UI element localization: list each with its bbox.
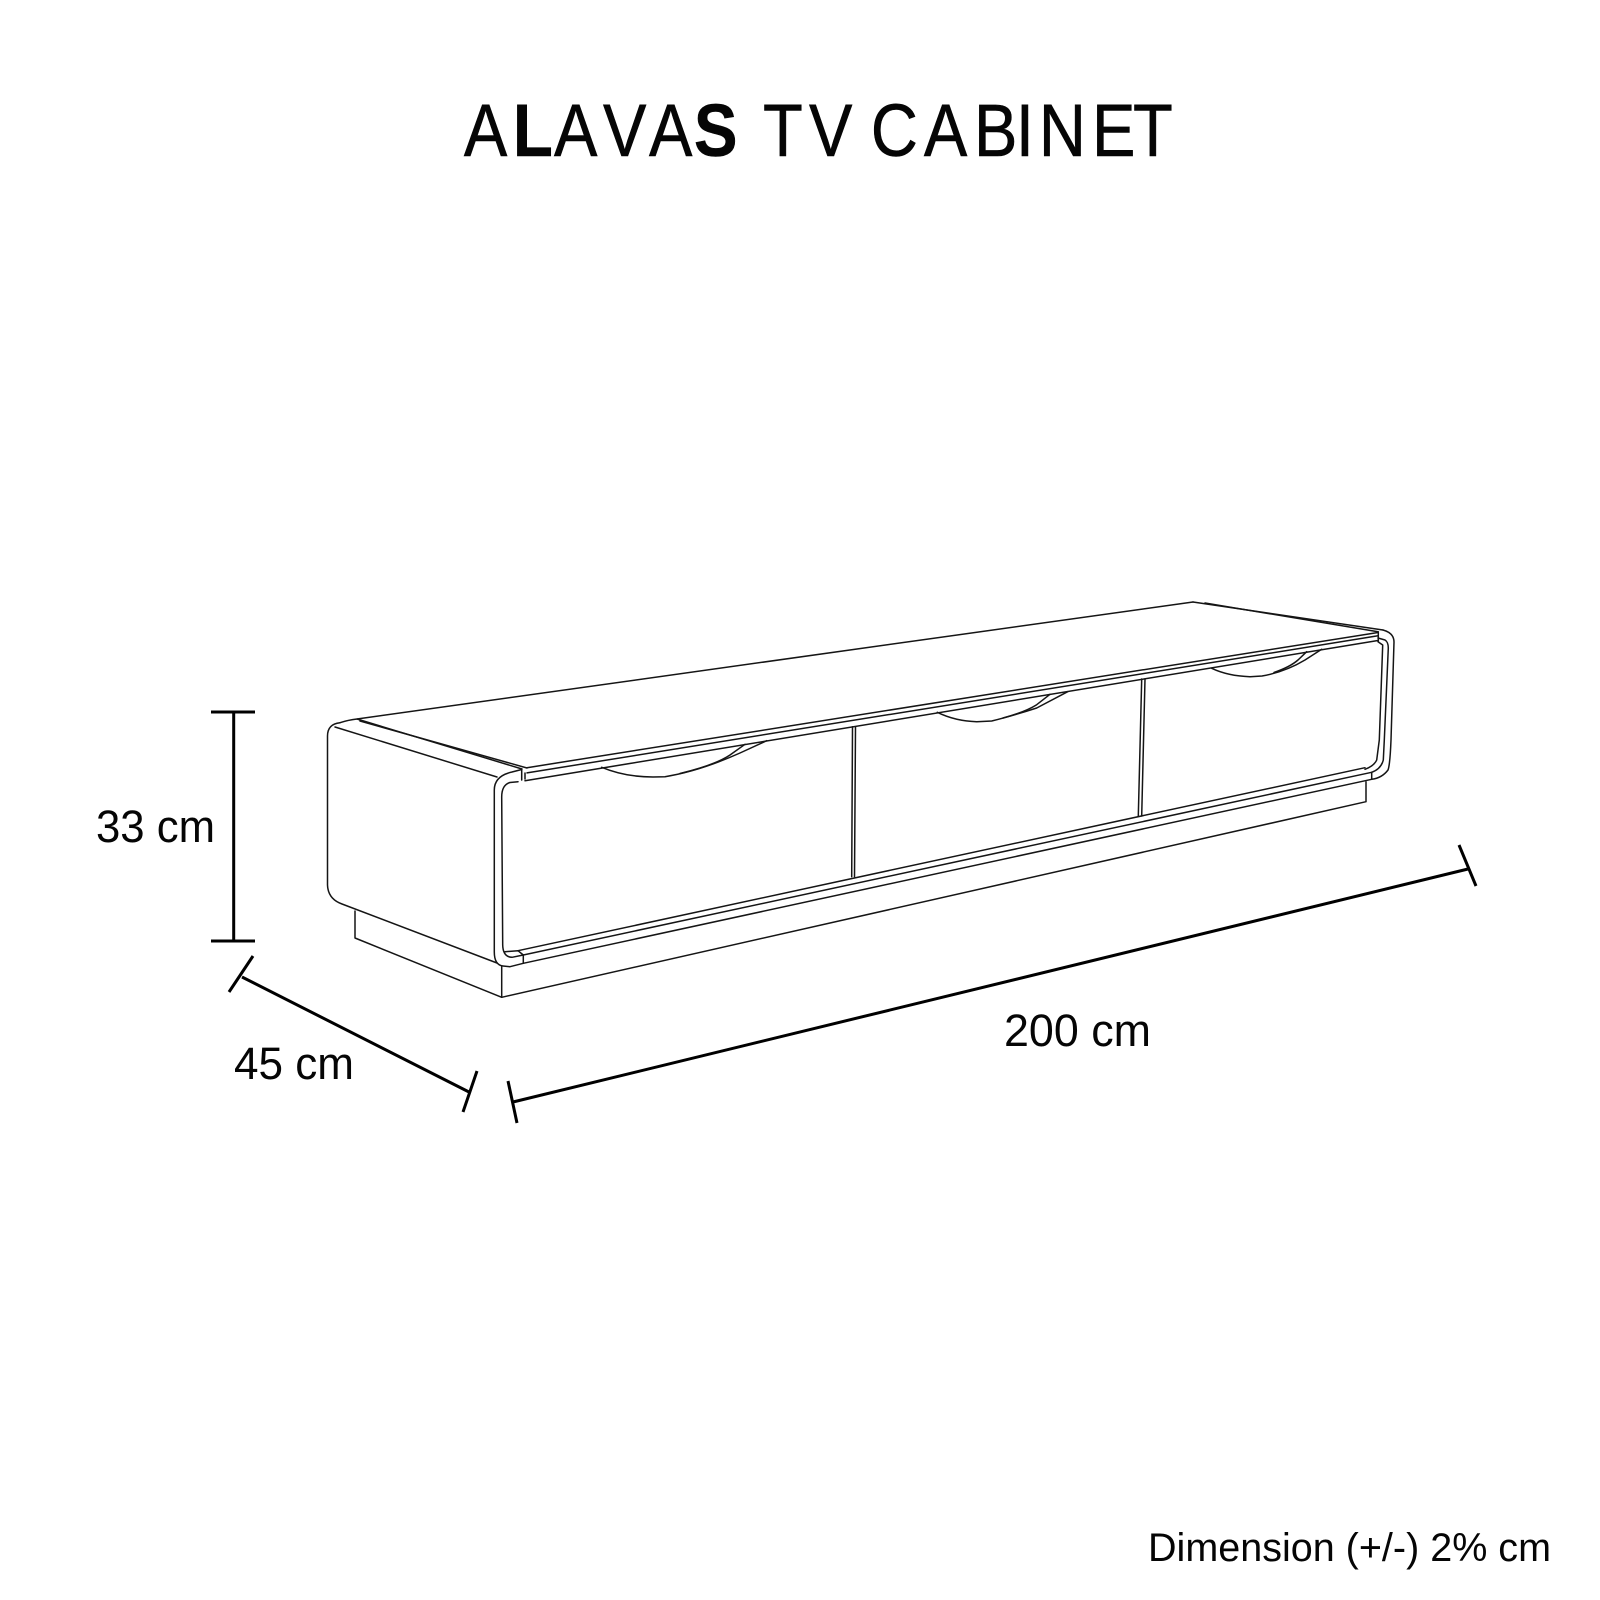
drawer handle left [602,741,767,777]
front frame left curve [494,770,525,967]
dimension: height 33 cm [96,712,255,941]
cabinet line drawing [328,602,1394,997]
cabinet top surface [340,602,1383,769]
plinth base [355,782,1366,997]
drawer gaps [852,679,1145,877]
title: ALAVAS TV CABINET [464,89,1173,172]
front frame right curve [1365,630,1394,779]
top rail lines [525,632,1378,781]
cabinet left side panel [328,723,497,963]
bottom rail lines [518,768,1372,963]
drawer handle right [1212,649,1322,677]
dimension: height 33 cm: 33 cm [96,801,215,852]
dimension: width 200 cm [508,845,1476,1123]
dimension tolerance note: Dimension (+/-) 2% cm [1148,1526,1551,1570]
dimension: width 200 cm: 200 cm [1004,1005,1151,1056]
dimension: depth 45 cm [229,956,477,1112]
dimension: depth 45 cm: 45 cm [234,1038,354,1089]
drawer handle middle [937,692,1068,722]
